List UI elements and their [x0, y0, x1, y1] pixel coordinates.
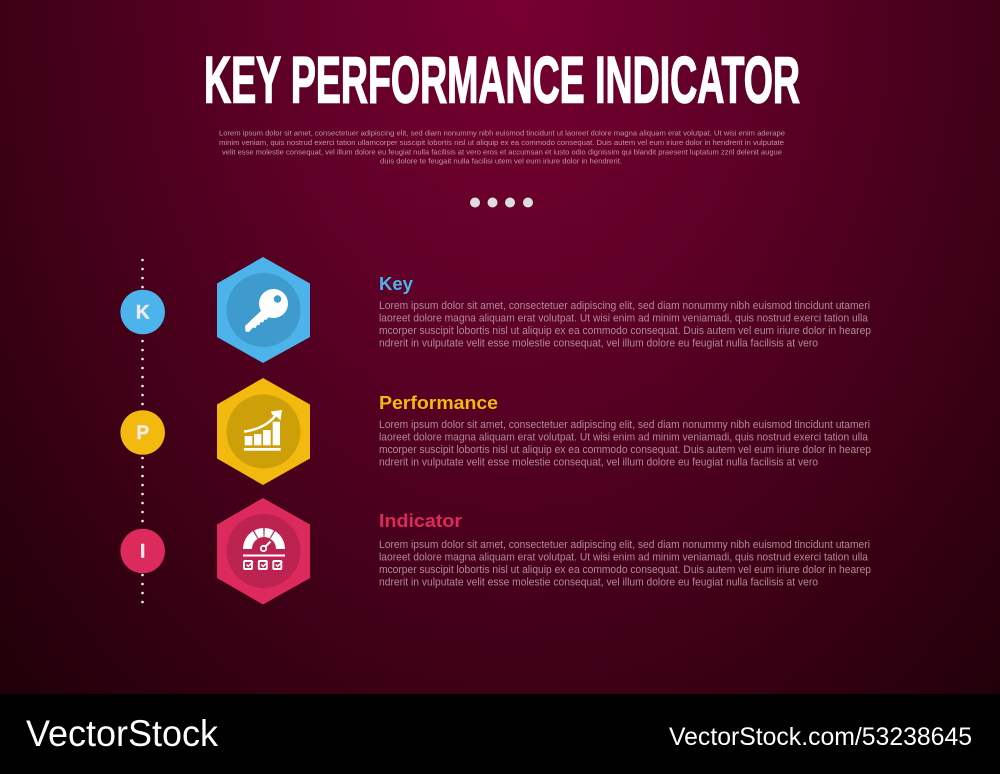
body text: mcorper suscipit lobortis nisl ut aliquip ex ea commodo consequat. Duis autem vel eum iriure dolor in hearep	[379, 564, 871, 576]
body text: ndrerit in vulputate velit esse molestie consequat, vel illum dolore eu feugiat nulla facilisis at vero	[379, 576, 818, 588]
intro text: duis dolore te feugait nulla facilisi utem vel eum iriure dolor in hendrerit.	[380, 158, 622, 166]
body text: Lorem ipsum dolor sit amet, consectetuer adipiscing elit, sed diam nonummy nibh euismod tincidunt utameri	[379, 300, 870, 312]
intro text: minim veniam, quis nostrud exerci tation ullamcorper suscipit lobortis nisl ut aliquip ex ea commodo consequat. Duis autem vel eum iriure dolor in hendrerit in vulputate	[219, 140, 784, 147]
icon: key in hexagon	[217, 257, 310, 363]
body text	[379, 539, 871, 588]
body text: laoreet dolore magna aliquam erat volutpat. Ut wisi enim ad minim veniamadi, quis nostrud exerci tation ulla	[379, 552, 868, 564]
letter badge K	[120, 290, 165, 334]
panel: key	[120, 257, 871, 363]
letter badge P	[120, 410, 165, 455]
body text: laoreet dolore magna aliquam erat volutpat. Ut wisi enim ad minim veniamadi, quis nostrud exerci tation ulla	[379, 312, 868, 324]
letter badge I	[120, 529, 165, 573]
pagination dots	[470, 198, 533, 208]
body text	[379, 419, 871, 468]
heading: Key: Key	[379, 273, 414, 294]
body text: mcorper suscipit lobortis nisl ut aliquip ex ea commodo consequat. Duis autem vel eum iriure dolor in hearep	[379, 444, 871, 456]
heading: Indicator: Indicator	[379, 510, 462, 531]
panel: performance	[120, 378, 871, 485]
body text	[379, 300, 871, 350]
intro text: Lorem ipsum dolor sit amet, consectetuer adipiscing elit, sed diam nonummy nibh euismod tincidunt ut laoreet dolore magna aliquam erat volutpat. Ut wisi enim aderape	[219, 130, 785, 138]
intro text	[219, 130, 785, 166]
letter badge K: K	[136, 302, 150, 323]
body text: ndrerit in vulputate velit esse molestie consequat, vel illum dolore eu feugiat nulla facilisis at vero	[379, 338, 818, 350]
intro text: velit esse molestie consequat, vel illum dolore eu feugiat nulla facilisis at vero eros et accumsan et iusto odio dignissim qui blandit praesent luptatum zzril delenit augue	[222, 150, 782, 156]
body text: Lorem ipsum dolor sit amet, consectetuer adipiscing elit, sed diam nonummy nibh euismod tincidunt utameri	[379, 419, 870, 431]
body text: mcorper suscipit lobortis nisl ut aliquip ex ea commodo consequat. Duis autem vel eum iriure dolor in hearep	[379, 325, 871, 337]
footer url: VectorStock.com/53238645	[669, 723, 972, 751]
letter badge P: P	[136, 423, 149, 444]
body text: Lorem ipsum dolor sit amet, consectetuer adipiscing elit, sed diam nonummy nibh euismod tincidunt utameri	[379, 539, 870, 551]
body text: ndrerit in vulputate velit esse molestie consequat, vel illum dolore eu feugiat nulla facilisis at vero	[379, 456, 818, 468]
body text: laoreet dolore magna aliquam erat volutpat. Ut wisi enim ad minim veniamadi, quis nostrud exerci tation ulla	[379, 432, 868, 444]
letter badge I: I	[140, 542, 145, 563]
heading: Performance: Performance	[379, 392, 498, 413]
footer bar	[0, 694, 1000, 774]
icon: growth chart in hexagon	[217, 378, 310, 485]
icon: gauge and checkboxes in hexagon	[217, 498, 310, 604]
dotted timeline	[141, 259, 144, 603]
panel: indicator	[120, 498, 871, 604]
footer logo text: VectorStock	[26, 713, 218, 754]
